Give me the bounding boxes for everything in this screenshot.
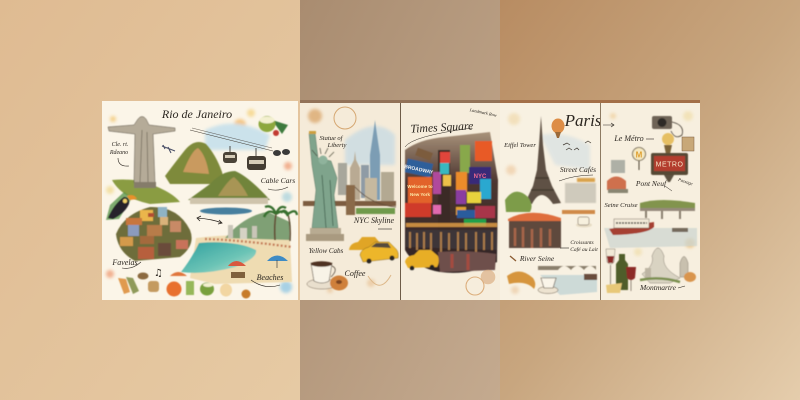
illustration: Statue of Liberty bbox=[306, 131, 344, 241]
illustration: river, bridge and boat bbox=[604, 200, 697, 248]
label: Cristo Redentor bbox=[109, 142, 129, 166]
label: Landmark note: Landmark Row bbox=[468, 107, 497, 118]
title: Times Square: Times Square bbox=[410, 119, 474, 136]
background: middle panel bbox=[300, 0, 500, 400]
label: Beaches: Beaches bbox=[257, 273, 283, 282]
illustration: cafe sketch bbox=[565, 178, 596, 203]
illustration: wine and cheese bbox=[606, 249, 636, 293]
illustration: Eiffel Tower bbox=[525, 116, 561, 204]
illustration: river bridge bbox=[538, 266, 597, 295]
label: Cristo Redentor: Cle. rt. bbox=[112, 142, 128, 148]
label: Seine Cruise: Seine Cruise bbox=[604, 202, 638, 209]
illustration: yellow taxis bbox=[349, 237, 398, 264]
text on signs: BROADWAY bbox=[404, 164, 434, 176]
text on signs bbox=[404, 164, 487, 197]
label: Cristo Redentor: Rdeano bbox=[109, 150, 128, 156]
icon: camera bbox=[652, 116, 683, 137]
text on signs: New York bbox=[410, 192, 431, 197]
label: Pont Neuf: Pont Neuf bbox=[635, 179, 667, 188]
crowd bbox=[406, 230, 497, 250]
page fold: New York bbox=[400, 103, 401, 300]
icon: airplane bbox=[162, 145, 175, 153]
label: Montmartre: Montmartre bbox=[639, 283, 677, 292]
label: NYC Skyline bbox=[353, 216, 395, 229]
illustration: Sugarloaf mountains bbox=[165, 142, 270, 214]
label: small note: Passage bbox=[677, 177, 693, 186]
panel: Rio de Janeiro page bbox=[102, 101, 298, 300]
illustration: toucan bbox=[106, 192, 137, 220]
label: Coffee: Coffee bbox=[345, 269, 366, 278]
label: Cable Cars bbox=[261, 176, 295, 190]
label: Croissants, Cafe au Lait bbox=[560, 240, 598, 253]
page fold: Paris bbox=[600, 103, 601, 300]
arrow: double arrow bbox=[197, 216, 222, 224]
label: Statue of Liberty: Statue of bbox=[320, 135, 344, 142]
icon: sunglasses bbox=[273, 149, 290, 156]
icon: coffee cup bbox=[538, 278, 558, 294]
title: Paris: Paris bbox=[564, 111, 602, 130]
icon: coconut drink bbox=[258, 116, 288, 136]
label: Street Cafes bbox=[559, 165, 596, 181]
label: Le Metro: Le Métro bbox=[613, 134, 644, 143]
icon: red beach umbrella bbox=[228, 261, 246, 278]
label: Pont Neuf bbox=[635, 179, 672, 191]
background: left panel bbox=[0, 0, 300, 400]
label: River Seine: River Seine bbox=[519, 254, 555, 263]
icon: music note: ♫ bbox=[154, 268, 163, 279]
label: Statue of Liberty: Liberty bbox=[327, 142, 347, 149]
label: Cable Cars: Cable Cars bbox=[261, 176, 295, 185]
text on signs: NYC bbox=[474, 174, 487, 180]
sign text: METRO: METRO bbox=[656, 162, 683, 168]
signs: neon billboards bbox=[405, 141, 495, 226]
coffee ring stain bbox=[368, 275, 391, 285]
label: Eiffel Tower: Eiffel Tower bbox=[503, 142, 536, 149]
illustration: Copacabana beach bbox=[181, 212, 292, 284]
icon: beach umbrella bbox=[267, 256, 288, 268]
panel: Paris left page bbox=[500, 100, 700, 300]
icon: hot air balloon bbox=[552, 118, 564, 138]
illustration: favela houses bbox=[116, 207, 192, 261]
arrow: Paris to page bbox=[603, 123, 614, 127]
illustration: street cafe terrace bbox=[508, 212, 595, 248]
icon: croissant bbox=[507, 271, 535, 289]
label: Beaches bbox=[251, 273, 283, 287]
coffee ring stains bbox=[466, 270, 495, 295]
illustration: Pont Neuf sketch bbox=[607, 160, 628, 193]
panel: New York left page bbox=[300, 100, 500, 300]
taxi bbox=[405, 250, 439, 268]
illustration: Sacre-Coeur, Montmartre bbox=[640, 248, 696, 283]
title: Times Square bbox=[405, 119, 474, 147]
title: Rio de Janeiro: Rio de Janeiro bbox=[161, 107, 232, 121]
label: Croissants, Cafe au Lait: Croissants bbox=[570, 240, 594, 246]
panel: Times Square page bbox=[401, 103, 500, 300]
label: Favelas: Favelas bbox=[111, 258, 138, 267]
icons: beach items and drinks bbox=[118, 272, 250, 298]
icon: coffee and donut bbox=[307, 261, 348, 290]
label: Statue of Liberty bbox=[320, 135, 347, 149]
illustration: palm trees bbox=[264, 206, 297, 241]
label: NYC Skyline: NYC Skyline bbox=[353, 216, 395, 225]
text on signs: Welcome to bbox=[407, 184, 433, 189]
label: Yellow Cabs: Yellow Cabs bbox=[309, 247, 344, 255]
icon: stamp bbox=[682, 137, 694, 151]
illustration: neon street scene bbox=[405, 132, 498, 273]
icon: birds bbox=[563, 141, 591, 150]
icon: metro sign lamp bbox=[651, 133, 688, 182]
illustration: NYC skyline and bridge bbox=[303, 120, 396, 215]
label: Street Cafes: Street Cafés bbox=[560, 165, 596, 174]
panel: Paris right page bbox=[601, 103, 700, 300]
icon: M pin bbox=[632, 148, 646, 170]
illustration: cable cars bbox=[190, 128, 273, 170]
coffee ring stain bbox=[334, 107, 356, 129]
illustration: trees bbox=[505, 192, 532, 212]
icon letter: M: M bbox=[636, 150, 643, 160]
label: Croissants, Cafe au Lait: Café au Lait bbox=[570, 246, 598, 253]
illustration: Christ the Redeemer bbox=[108, 116, 180, 204]
background: right panel bbox=[500, 0, 800, 400]
